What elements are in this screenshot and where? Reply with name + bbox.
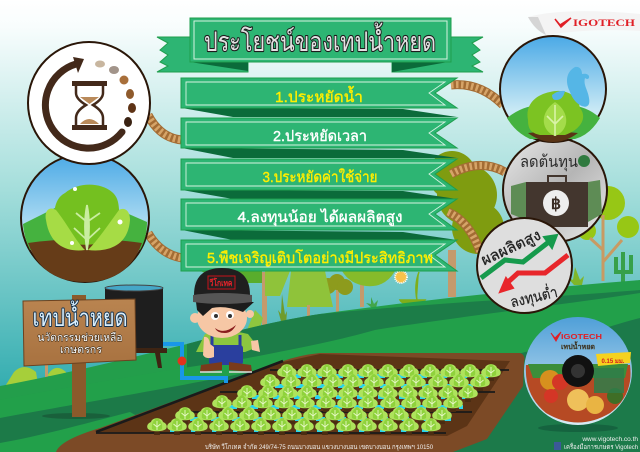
banner 5: 5.พืชเจริญเติบโตอย่างมีประสิทธิภาพ (207, 249, 433, 267)
footer website and facebook: www.vigotech.co.th (581, 436, 638, 443)
footer company address: บริษัท วีโกเทค จำกัด 249/74-75 ถนนบางบอน แขวงบางบอน เขตบางบอน กรุงเทพฯ 10150 (205, 443, 433, 451)
banner 2: 2.ประหยัดเวลา (273, 128, 367, 145)
background trees (4, 151, 639, 388)
water tank (105, 285, 167, 368)
circle: reduced cost: ฿ (551, 196, 561, 213)
farmer mascot: วีโกเทค (209, 277, 232, 288)
banner 4 (181, 199, 457, 240)
banner 3 (181, 159, 457, 199)
title ribbon (157, 18, 483, 72)
wooden sign (23, 295, 136, 419)
banner 3: 3.ประหยัดค่าใช้จ่าย (262, 168, 378, 186)
circle: high yield low cost: ผลผลิตสูง (479, 227, 544, 269)
product disc: เทปน้ำหยด (561, 340, 595, 351)
circle: reduced cost (503, 138, 607, 242)
wooden sign: นวัตกรรมช่วยเหลือ (38, 331, 122, 344)
logo ribbon (528, 11, 640, 35)
hills (0, 280, 640, 452)
footer website and facebook (554, 436, 638, 451)
product disc: 0.15 มม. (602, 358, 625, 365)
farmer mascot (190, 268, 260, 372)
banner 1 (181, 78, 457, 117)
banner 5 (181, 240, 457, 271)
banner 2 (181, 118, 457, 158)
brown soil field (56, 353, 524, 452)
circle: water drop on lettuce (500, 36, 606, 142)
circle: high yield low cost: ลงทุนต่ำ (508, 281, 560, 312)
heading: ประโยชน์ของเทปน้ำหยด (204, 22, 436, 57)
ropes connecting circles to banners (148, 85, 505, 258)
banner 1: 1.ประหยัดน้ำ (275, 86, 363, 106)
product disc: IGOTECH (561, 332, 602, 341)
wooden sign: เกษตรกร (60, 344, 102, 356)
circle: lettuce growing (21, 154, 149, 282)
circle: hourglass time icon (28, 42, 150, 164)
circle: high yield low cost (477, 218, 572, 313)
banner 4: 4.ลงทุนน้อย ได้ผลผลิตสูง (238, 208, 402, 227)
lettuce rows (147, 364, 501, 435)
sign title: เทปน้ำหยด (32, 300, 128, 332)
product disc (524, 317, 632, 432)
logo ribbon: IGOTECH (573, 19, 636, 29)
blue drip pipe with valve (163, 344, 226, 383)
circle: reduced cost: ลดต้นทุน (520, 153, 578, 172)
